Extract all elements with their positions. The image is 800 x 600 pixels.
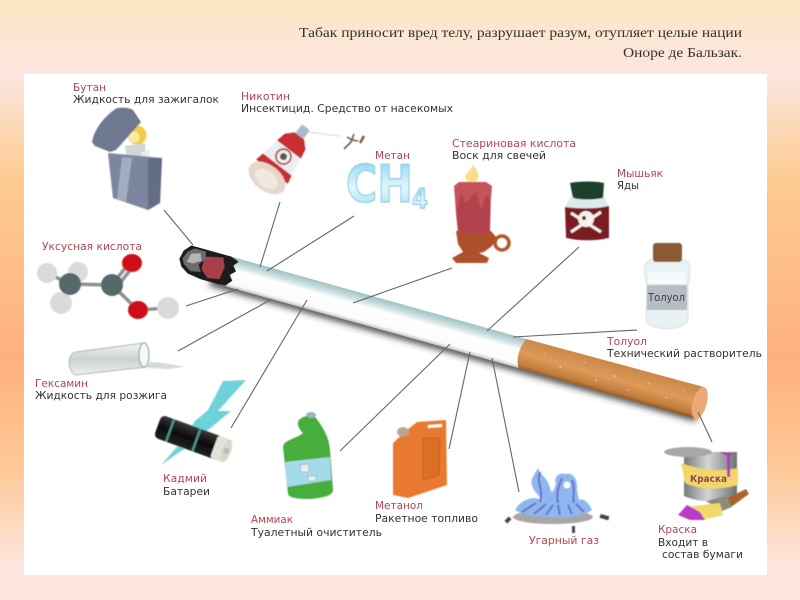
label: toluene: Технический растворитель xyxy=(606,348,762,360)
icon: canister xyxy=(393,420,447,498)
label: arsenic: Яды xyxy=(617,180,639,192)
item: nicotine xyxy=(241,91,453,201)
item: methane xyxy=(346,150,428,215)
label: butane: Бутан xyxy=(73,82,106,94)
icon: insecticide spray xyxy=(242,114,364,201)
label: toluene: Толуол xyxy=(606,336,647,348)
label: nicotine xyxy=(241,91,453,115)
item: methanol xyxy=(375,420,478,525)
cigarette xyxy=(175,242,711,423)
icon: toluene bottle xyxy=(644,243,690,329)
label: toluene xyxy=(606,336,762,360)
label: methanol: Ракетное топливо xyxy=(375,513,478,525)
label: carbon monoxide: Угарный газ xyxy=(529,535,599,547)
label: hexamine xyxy=(35,378,167,402)
label: butane: Жидкость для зажигалок xyxy=(73,94,219,106)
quote heading: Табак приносит вред телу, разрушает разум, отупляет целые нации xyxy=(299,26,743,41)
item: arsenic xyxy=(565,168,663,240)
leader lines xyxy=(164,202,712,492)
label: paint xyxy=(658,524,743,561)
label: ammonia: Туалетный очиститель xyxy=(250,527,382,539)
label: stearic acid: Стеариновая кислота xyxy=(452,138,576,150)
label: nicotine: Никотин xyxy=(241,91,290,103)
icon: gas burner xyxy=(504,468,609,533)
icon: glass tube xyxy=(69,343,185,375)
label: cadmium xyxy=(163,473,210,498)
label: butane xyxy=(73,82,219,106)
label: cadmium: Батареи xyxy=(163,486,210,498)
item: carbon monoxide xyxy=(504,468,609,547)
icon: molecule xyxy=(37,254,179,319)
label: arsenic: Мышьяк xyxy=(617,168,663,180)
icon: cleaner bottle xyxy=(283,412,333,499)
label: ammonia xyxy=(250,514,382,539)
icon: poison bottle xyxy=(565,182,609,240)
label: ammonia: Аммиак xyxy=(251,514,293,526)
label: hexamine: Гексамин xyxy=(35,378,88,390)
icon: candle xyxy=(452,165,509,263)
item: cadmium xyxy=(154,380,246,498)
label: stearic acid: Воск для свечей xyxy=(452,150,546,162)
label: paint: Входит в xyxy=(658,537,708,549)
label: paint: Краска xyxy=(658,524,697,536)
item: hexamine xyxy=(35,343,185,402)
label: acetic acid: Уксусная кислота xyxy=(42,241,142,253)
label: stearic acid xyxy=(452,138,576,162)
label: methanol xyxy=(375,500,478,525)
item: butane xyxy=(73,82,219,210)
label: arsenic xyxy=(617,168,663,192)
label: nicotine: Инсектицид. Средство от насекомых xyxy=(241,103,453,115)
icon: paint can and brush: Краска xyxy=(690,474,727,485)
label: hexamine: Жидкость для розжига xyxy=(35,390,167,402)
label: paint: состав бумаги xyxy=(662,549,743,561)
quote heading xyxy=(299,26,743,61)
icon: lighter xyxy=(92,108,162,210)
label: methane: Метан xyxy=(375,150,410,162)
item: stearic acid xyxy=(452,138,576,263)
label: cadmium: Кадмий xyxy=(163,473,207,485)
item: toluene xyxy=(606,243,762,360)
icon: toluene bottle: Толуол xyxy=(647,292,685,304)
white content panel xyxy=(24,74,767,575)
icon: CH4 formula: 4 xyxy=(412,182,428,215)
icon: battery and lightning xyxy=(154,380,246,465)
item: ammonia xyxy=(250,412,382,539)
quote heading: Оноре де Бальзак. xyxy=(623,46,742,61)
icon: CH4 formula: CH xyxy=(346,155,413,215)
label: methanol: Метанол xyxy=(375,500,423,512)
item: acetic acid xyxy=(37,241,179,319)
item: paint xyxy=(658,447,749,561)
